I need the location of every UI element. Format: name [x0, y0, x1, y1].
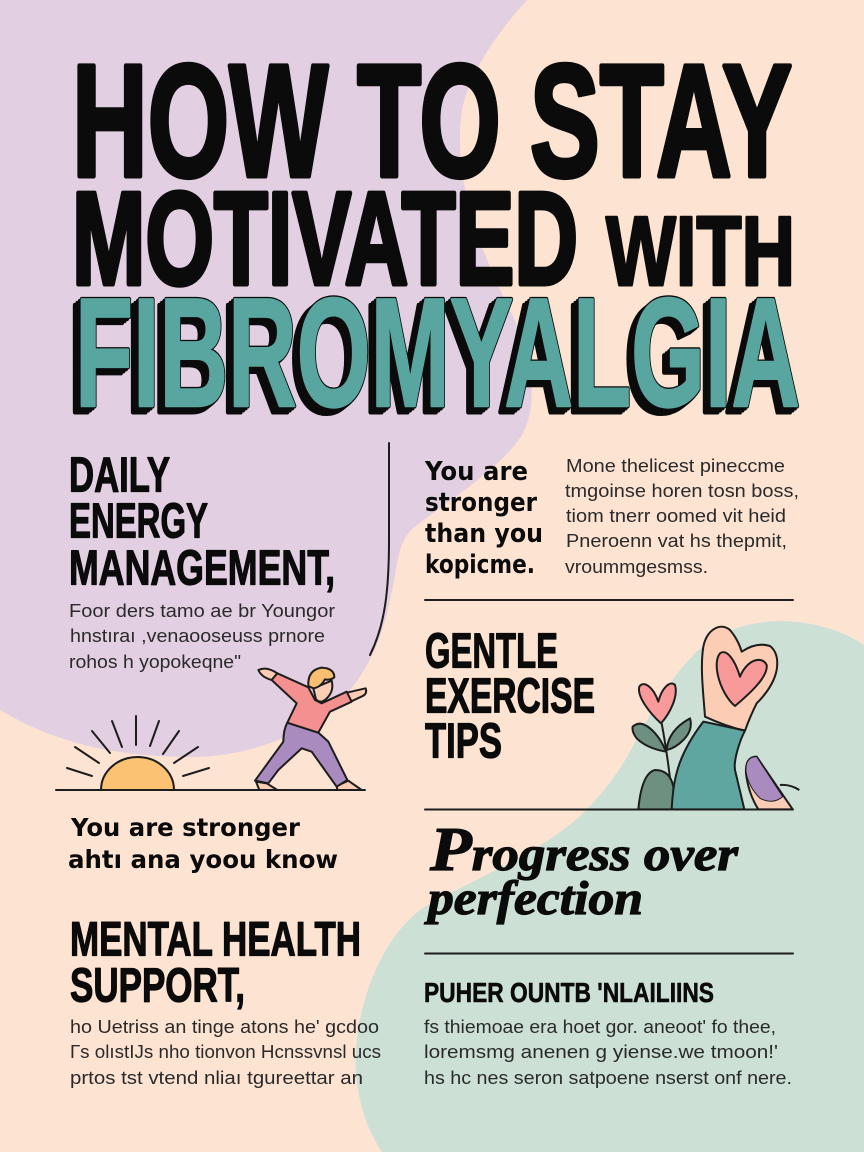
title: [68, 31, 800, 445]
text block: mental health body: ho Uetriss an tinge atons he' gcdoo: [70, 1016, 379, 1037]
script quote: progress over perfection: perfection: [424, 872, 643, 925]
text block: energy body: rohos h yopokeqne": [69, 651, 241, 672]
text block: further body: hs hc nes seron satpoene nserst onf nere.: [424, 1067, 792, 1088]
quote: you are stronger than you kopicme: stronger: [425, 488, 537, 518]
text block: right body top: vroummgesmss.: [565, 556, 708, 577]
vertical curved divider: [370, 443, 389, 655]
script quote: progress over perfection: Progress over: [429, 816, 739, 884]
nail: [746, 757, 783, 801]
heading: mental health support: [70, 914, 361, 1012]
text block: energy body: [69, 600, 335, 672]
heading: daily energy management: [69, 448, 335, 596]
panel: further notes: [424, 977, 792, 1088]
title line: motivated: MOTIVATED: [72, 165, 578, 312]
title line: with: WITH: [606, 196, 795, 306]
heart in hand: [717, 652, 767, 706]
quote: you are stronger than you kopicme: than you: [425, 519, 543, 549]
plant pot mound: [638, 770, 674, 809]
script quote: progress over perfection: [424, 816, 739, 925]
quote: you are stronger than you know: [68, 813, 338, 874]
thumb: [746, 757, 793, 809]
plant stem: [662, 723, 671, 783]
text block: further body: [424, 1016, 792, 1088]
text block: mental health body: Гs olıstIJs nho tionvon Hcnssvnsl ucs: [70, 1041, 381, 1062]
panel: daily energy management: [69, 448, 335, 672]
baseline under sun: [56, 789, 365, 791]
background: lavender blob: [0, 0, 532, 757]
text block: mental health body: prtos tst vtend nliaı tgureettar an: [70, 1067, 363, 1088]
text block: right body top: tmgoinse horen tosn boss,: [565, 480, 799, 501]
heading: daily energy management: DAILY: [69, 448, 170, 502]
icon: stretching person: [255, 668, 366, 790]
text block: right body top: [565, 455, 799, 577]
text block: further body: loremsmg anenen g yiense.we tmoon!': [424, 1041, 778, 1062]
leaves: [632, 724, 666, 752]
heading: gentle exercise tips: EXERCISE: [425, 670, 595, 724]
heading: daily energy management: MANAGEMENT,: [69, 542, 335, 596]
quote: you are stronger than you kopicme: [424, 457, 543, 580]
heading: gentle exercise tips: GENTLE: [425, 624, 558, 678]
text block: energy body: Foor ders tamo ae br Youngor: [69, 600, 335, 621]
heading: gentle exercise tips: [425, 624, 595, 768]
heading: mental health support: SUPPORT,: [70, 960, 245, 1012]
heading: gentle exercise tips: TIPS: [425, 714, 502, 768]
text block: right body top: tiom tnerr oomed vit heid: [566, 505, 786, 526]
text block: mental health body: [70, 1016, 381, 1088]
text block: energy body: hnstıraı ,venaooseuss prnore: [70, 625, 325, 646]
quote: you are stronger than you kopicme: kopicme.: [425, 550, 535, 580]
small heart: [639, 684, 676, 723]
heading: daily energy management: ENERGY: [69, 494, 208, 548]
icon: rising sun: [67, 716, 209, 790]
quote: you are stronger than you kopicme: You are: [424, 457, 528, 487]
background: mint blob: [356, 621, 864, 1152]
heading: mental health support: MENTAL HEALTH: [70, 914, 361, 966]
text block: right body top: Mone thelicest pineccme: [566, 455, 785, 476]
hand: [702, 627, 777, 731]
quote: you are stronger than you know: You are stronger: [70, 813, 301, 842]
text block: further body: fs thiemoae era hoet gor. aneoot' fo thee,: [424, 1016, 776, 1037]
quote: you are stronger than you know: ahtı ana yoou know: [68, 845, 338, 874]
icon: hand with heart and plant: [632, 627, 799, 809]
heading: puher ountb nlailiins: PUHER OUNTB 'NLAILIINS: [424, 977, 714, 1008]
text block: right body top: Pneroenn vat hs thepmit,: [566, 530, 787, 551]
panel: mental health support: [70, 914, 381, 1088]
sleeve: [672, 722, 745, 809]
